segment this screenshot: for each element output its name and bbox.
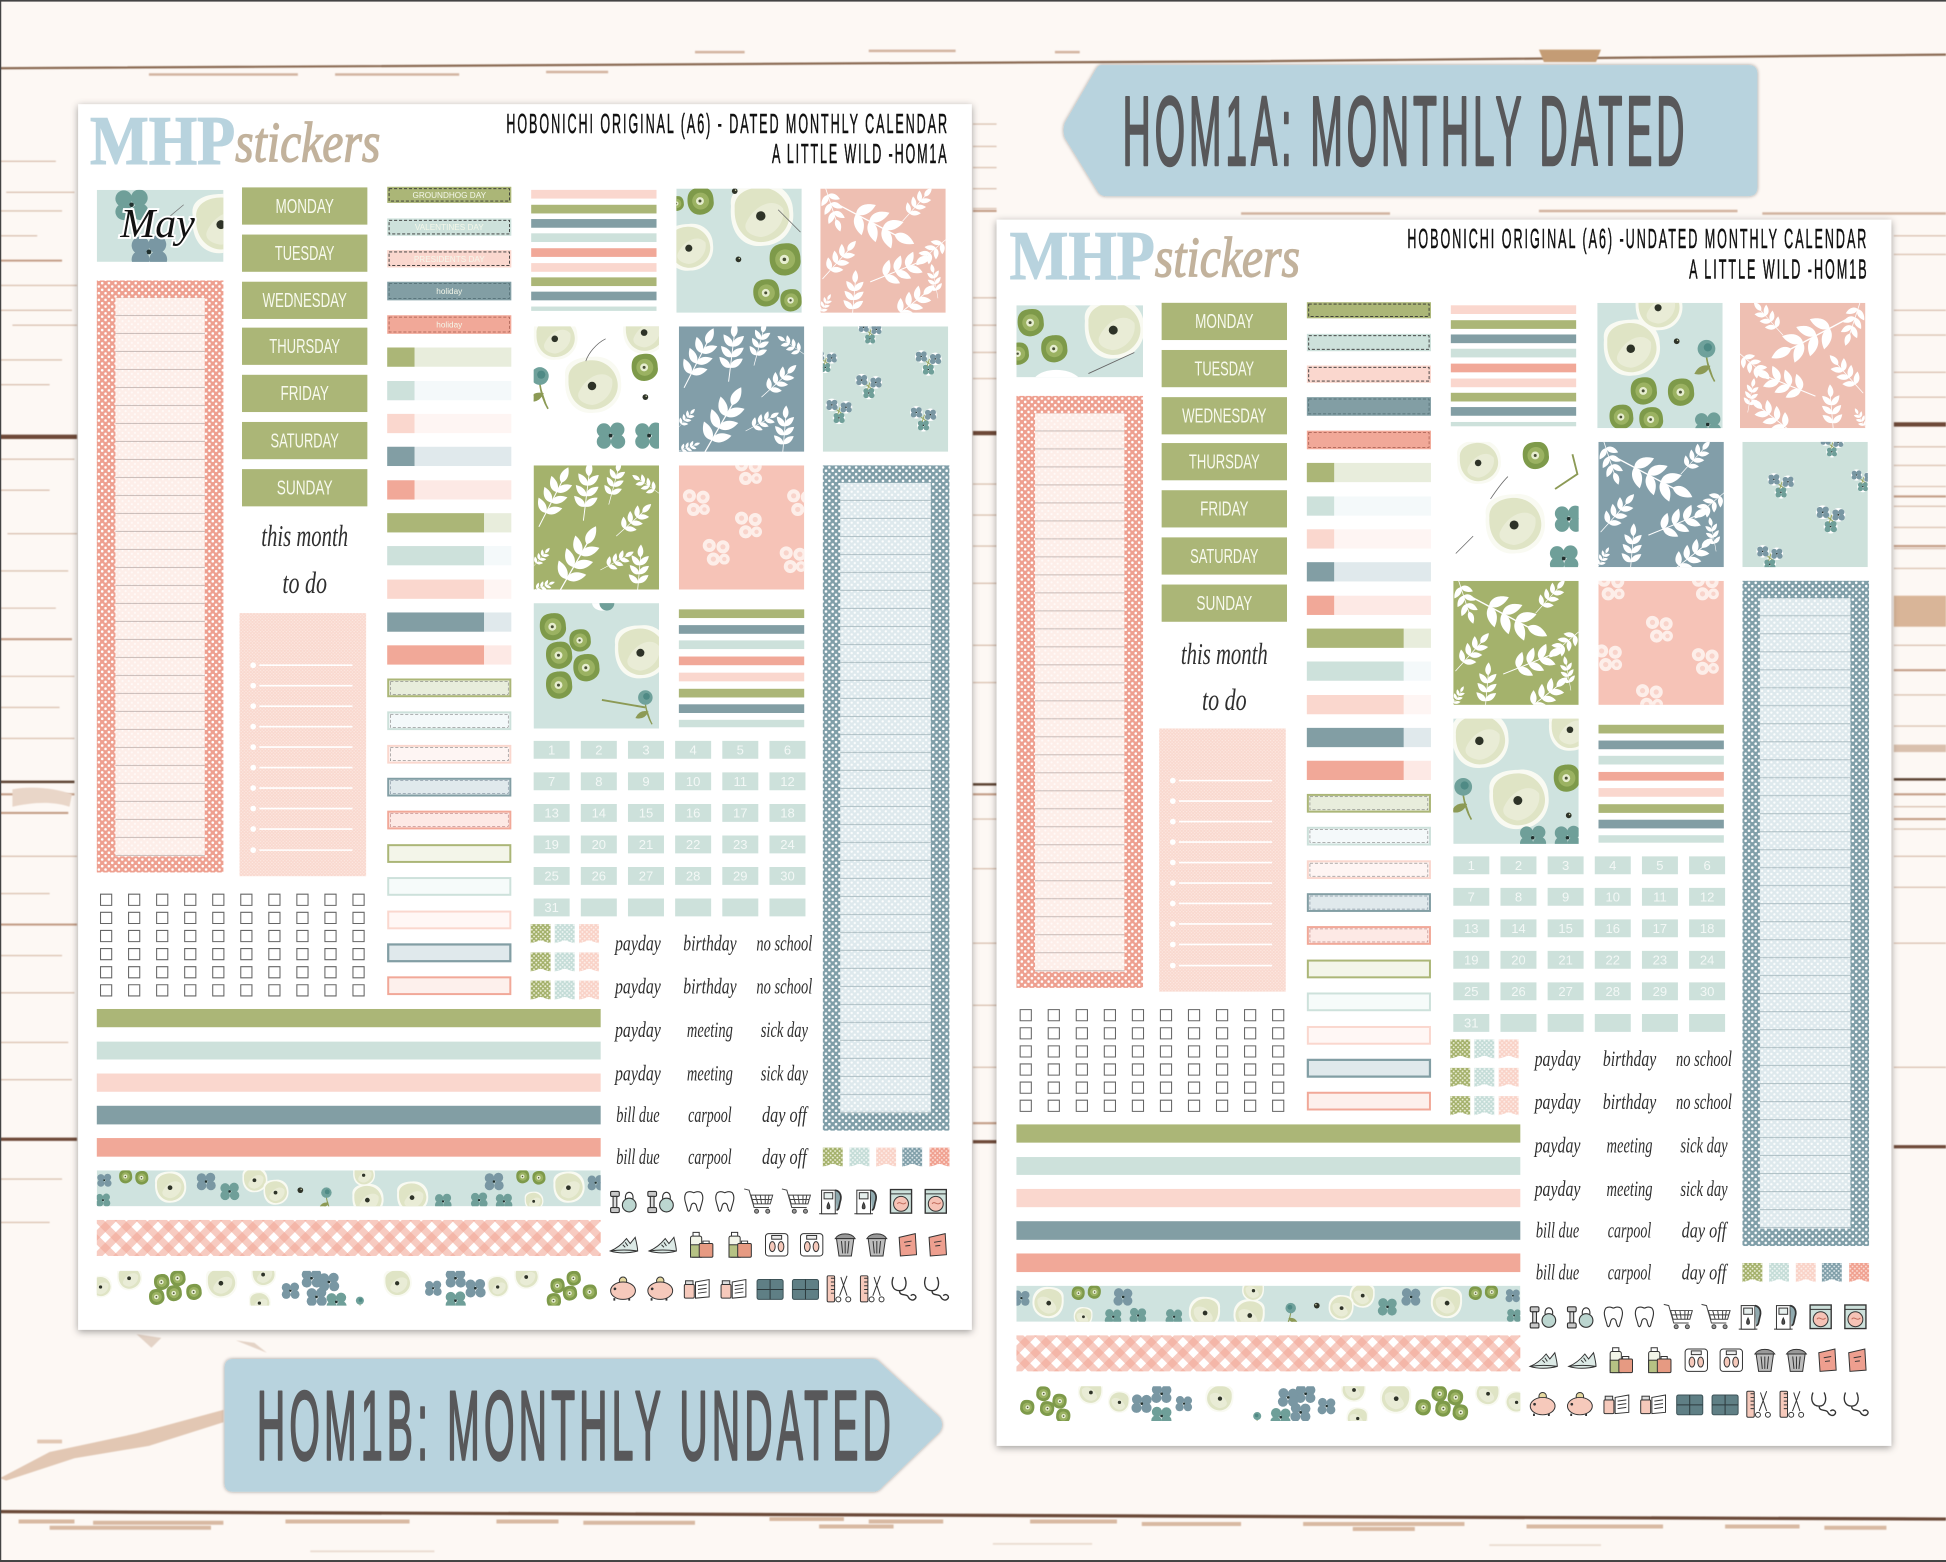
floral washi strip: white [96,1270,597,1306]
date number grid: 8 [1515,890,1522,905]
floral washi strip: mint [1016,1286,1520,1322]
date number grid: 23 [733,837,748,852]
script word stickers: no school [1676,1089,1732,1114]
weekday labels: SUNDAY [277,477,333,500]
to-do list panel [240,613,366,876]
pink lined tracker [1016,396,1143,988]
this month / to do script: to do [282,565,327,600]
two-tone header strips [1307,463,1431,780]
date number grid: 6 [784,743,791,758]
date number grid: 21 [639,837,653,852]
leaf sticker: pink [820,188,946,313]
date number grid: 16 [686,806,700,821]
date number grid: 25 [1464,984,1479,999]
script word stickers: birthday [683,931,737,956]
holiday label strips: GROUNDHOG DAY [412,191,487,200]
sheet title [1407,224,1867,285]
logo: MHP [1010,218,1155,295]
date number grid: 21 [1558,953,1573,968]
small flower sticker: pink [679,465,804,590]
leaf sticker: pink [1740,303,1866,428]
script word stickers: birthday [1603,1089,1656,1114]
script word stickers: bill due [616,1144,660,1169]
script word stickers: day off [1682,1260,1728,1285]
weekday labels: TUESDAY [275,242,335,265]
date number grid: 31 [544,900,559,915]
script word stickers: meeting [687,1017,733,1042]
weekday labels: WEDNESDAY [1182,405,1267,428]
holiday label strips: holiday [436,287,463,296]
this month / to do script: to do [1202,682,1247,717]
date number grid: 4 [690,743,697,758]
flag row [823,1148,949,1167]
date number grid: 27 [639,869,653,884]
gingham washi strip [1016,1335,1520,1371]
script word stickers: no school [1676,1046,1732,1071]
script word stickers: no school [756,973,812,998]
holiday label strips: VALENTINES DAY [415,223,484,232]
date number grid: 20 [592,837,606,852]
sheet title: A LITTLE WILD -HOM1B [1689,254,1867,285]
logo: stickers [235,111,380,174]
date number grid: 15 [1558,921,1573,936]
this month / to do script [261,518,348,600]
logo: stickers [1155,227,1300,290]
script word stickers: sick day [1680,1176,1728,1201]
weekday labels: THURSDAY [1189,451,1260,474]
outlined box strips [1308,795,1430,1110]
sheet title: HOBONICHI ORIGINAL (A6) -UNDATED MONTHLY CALENDAR [1407,224,1866,255]
sticker sheet A: dated [78,103,972,1330]
small flower sticker: mint [1742,442,1868,568]
script word stickers: payday [1533,1132,1581,1157]
script word stickers: bill due [616,1102,660,1127]
date number grid: 18 [1700,921,1714,936]
date number grid: 27 [1558,984,1573,999]
script word stickers: day off [762,1102,809,1127]
weekday labels: SUNDAY [1196,592,1252,615]
leaf sticker: blue [1598,442,1724,568]
floral sticker: white with poppies [534,326,659,449]
checkbox grid [101,894,364,996]
weekday labels: FRIDAY [1200,498,1249,521]
sheet title [506,108,947,170]
date number grid: 25 [544,869,559,884]
date number grid: 10 [686,774,700,789]
date number grid [1453,856,1725,1032]
weekday labels [242,187,367,506]
date number grid: 31 [1464,1016,1479,1031]
tag text: HOM1B: MONTHLY UNDATED [257,1370,891,1480]
leaf sticker: green [534,466,659,590]
date number grid: 17 [1653,921,1667,936]
date number grid: 24 [780,837,795,852]
solid washi bands [97,1009,601,1157]
to-do list panel [1159,729,1286,992]
flag row [1742,1263,1869,1282]
date number grid: 7 [1468,890,1475,905]
script word stickers: meeting [1607,1132,1652,1157]
stripe sticker 2 [1598,725,1724,843]
tag text: HOM1A: MONTHLY DATED [1123,76,1685,186]
holiday label strips: PRESIDENTS DAY [414,255,485,264]
date number grid: 5 [737,743,744,758]
weekday labels [1162,303,1287,622]
stripe sticker 1 [531,190,657,311]
tag: HOM1B monthly undated [225,1359,942,1492]
date number grid: 22 [686,837,700,852]
floral sticker: mint with poppies 2 [1453,718,1579,844]
month sticker: May [97,190,224,262]
icon stickers [1530,1304,1868,1417]
small flags [531,924,599,1000]
weekday labels: TUESDAY [1195,357,1254,380]
leaf sticker: blue [678,326,804,452]
script word stickers [614,931,812,1169]
script word stickers: meeting [687,1060,733,1085]
weekday labels: FRIDAY [280,382,329,405]
date number grid: 9 [642,774,650,789]
script word stickers: carpool [1608,1260,1651,1285]
month sticker: May: May [119,201,196,246]
pink lined tracker [97,280,223,872]
weekday labels: SATURDAY [271,429,339,452]
date number grid: 5 [1656,858,1664,873]
floral washi strip: mint [96,1170,601,1206]
script word stickers: payday [1533,1089,1581,1114]
date number grid: 9 [1562,890,1569,905]
date number grid: 6 [1703,858,1711,873]
date number grid: 12 [1700,890,1714,905]
weekday labels: THURSDAY [269,335,340,358]
script word stickers: bill due [1536,1260,1579,1285]
date number grid: 24 [1700,953,1714,968]
icon stickers [610,1189,948,1302]
weekday labels: WEDNESDAY [262,289,347,312]
script word stickers: payday [614,1060,661,1085]
this month / to do script [1181,636,1268,717]
date number grid: 13 [1464,921,1479,936]
date number grid: 4 [1609,858,1616,873]
sheet title: HOBONICHI ORIGINAL (A6) - DATED MONTHLY CALENDAR [506,108,947,139]
script word stickers: birthday [1603,1046,1656,1071]
script word stickers: carpool [688,1144,732,1169]
logo [90,103,380,180]
date number grid: 18 [780,806,795,821]
date number grid: 30 [1700,984,1714,999]
script word stickers: day off [1682,1217,1728,1242]
logo: MHP [90,103,235,180]
date number grid [534,741,805,916]
sheet title: A LITTLE WILD -HOM1A [772,139,947,170]
script word stickers: meeting [1607,1176,1652,1201]
script word stickers: carpool [1608,1217,1651,1242]
script word stickers: birthday [683,973,737,998]
leaf sticker: green [1453,580,1579,705]
script word stickers: carpool [688,1102,732,1127]
logo [1010,218,1300,295]
tag: HOM1A monthly dated [1064,65,1757,196]
script word stickers: sick day [761,1017,808,1042]
script word stickers: no school [756,931,812,956]
blank label strips [1307,302,1431,449]
blue lined tracker [1742,581,1869,1246]
holiday label strips: holiday [436,321,463,330]
date number grid: 28 [686,869,700,884]
floral sticker: white with poppies [1456,442,1579,568]
date number grid: 19 [1464,953,1479,968]
stripe sticker 2 [679,609,804,727]
sticker sheet B: undated [997,218,1891,1446]
date number grid: 1 [1468,858,1475,873]
two-tone header strips [387,347,511,665]
date number grid: 22 [1606,953,1620,968]
blank month sticker [1016,305,1143,378]
small flower sticker: mint [822,326,948,452]
date number grid: 3 [1562,858,1569,873]
date number grid: 11 [734,774,747,789]
date number grid: 13 [544,806,559,821]
date number grid: 7 [548,774,555,789]
date number grid: 16 [1606,921,1620,936]
date number grid: 15 [639,806,653,821]
floral sticker: mint with poppies [676,188,802,313]
script word stickers: bill due [1536,1217,1579,1242]
this month / to do script: this month [1181,636,1268,671]
date number grid: 19 [544,837,559,852]
gingham washi strip [97,1220,601,1256]
date number grid: 23 [1653,953,1667,968]
date number grid: 11 [1653,890,1667,905]
weekday labels: SATURDAY [1190,545,1259,568]
script word stickers: payday [614,931,661,956]
script word stickers: payday [1533,1176,1581,1201]
checkbox grid [1020,1010,1284,1111]
date number grid: 26 [1511,984,1526,999]
script word stickers: sick day [1680,1132,1728,1157]
weekday labels: MONDAY [1195,310,1254,333]
date number grid: 8 [595,774,602,789]
date number grid: 20 [1511,953,1526,968]
outlined box strips [388,679,510,994]
date number grid: 28 [1606,984,1620,999]
floral sticker: mint with green blooms [534,603,659,728]
floral sticker: mint with poppies [1597,302,1722,428]
script word stickers: day off [762,1144,809,1169]
script word stickers: sick day [761,1060,808,1085]
script word stickers: payday [1533,1046,1581,1071]
script word stickers [1533,1046,1732,1285]
floral washi strip: white [1020,1386,1520,1421]
date number grid: 2 [595,743,602,758]
date number grid: 1 [548,743,555,758]
date number grid: 29 [1653,984,1667,999]
stripe sticker 1 [1451,305,1576,426]
date number grid: 17 [733,806,748,821]
blue lined tracker [823,465,949,1131]
date number grid: 26 [592,869,606,884]
date number grid: 2 [1515,858,1522,873]
date number grid: 14 [592,806,606,821]
weekday labels: MONDAY [276,195,334,218]
date number grid: 14 [1511,921,1526,936]
script word stickers: payday [614,973,661,998]
date number grid: 30 [780,869,795,884]
small flags [1450,1040,1519,1115]
solid washi bands [1016,1124,1520,1272]
small flower sticker: pink [1598,580,1724,705]
script word stickers: payday [614,1017,661,1042]
date number grid: 3 [642,743,650,758]
holiday label strips [387,187,511,334]
this month / to do script: this month [261,518,348,553]
date number grid: 10 [1606,890,1620,905]
date number grid: 12 [780,774,795,789]
date number grid: 29 [733,869,748,884]
